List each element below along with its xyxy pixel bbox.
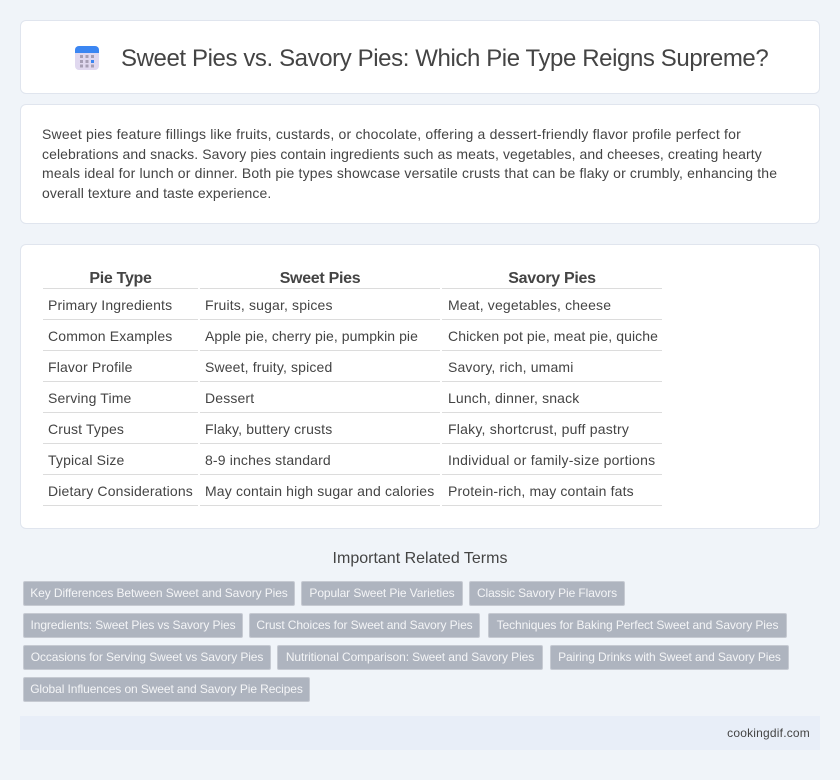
tag: Pairing Drinks with Sweet and Savory Pies	[558, 650, 781, 664]
intro paragraph	[42, 126, 777, 201]
row: dietary considerations: Dietary Considerations	[48, 483, 193, 499]
related terms tags	[23, 581, 789, 702]
row: serving time: Dessert	[205, 390, 254, 406]
footer source text: cookingdif.com	[727, 726, 810, 740]
intro paragraph: overall texture and taste experience.	[42, 185, 271, 201]
intro paragraph: Sweet pies feature fillings like fruits, custards, or chocolate, offering a dessert-friendly flavor profile perfect for	[42, 126, 741, 142]
row: serving time: Lunch, dinner, snack	[448, 390, 579, 406]
row: dietary considerations: Protein-rich, may contain fats	[448, 483, 634, 499]
row: common examples: Common Examples	[48, 328, 172, 344]
row: flavor profile	[48, 359, 574, 375]
title: Sweet Pies vs. Savory Pies: Which Pie Type Reigns Supreme?	[121, 45, 768, 72]
footer bar	[20, 716, 820, 750]
row: common examples	[48, 328, 658, 344]
row: serving time	[48, 390, 580, 406]
row: flavor profile: Savory, rich, umami	[448, 359, 574, 375]
tag	[550, 645, 789, 670]
row: dietary considerations: May contain high sugar and calories	[205, 483, 434, 499]
intro paragraph: celebrations and snacks. Savory pies contain ingredients such as meats, vegetables, and cheeses, creating hearty	[42, 146, 762, 162]
tag: Classic Savory Pie Flavors	[477, 586, 617, 600]
tag: Nutritional Comparison: Sweet and Savory Pies	[286, 650, 534, 664]
row: flavor profile: Sweet, fruity, spiced	[205, 359, 332, 375]
header panel	[20, 20, 820, 94]
tag: Popular Sweet Pie Varieties	[309, 586, 455, 600]
row: typical size: Typical Size	[48, 452, 124, 468]
row: typical size: Individual or family-size portions	[448, 452, 655, 468]
tag	[23, 613, 243, 638]
tag	[23, 581, 295, 606]
table header	[89, 270, 596, 287]
tag	[277, 645, 543, 670]
tag: Techniques for Baking Perfect Sweet and Savory Pies	[497, 618, 778, 632]
intro paragraph: meals ideal for lunch or dinner. Both pie types showcase versatile crusts that can be flaky or crumbly, enhancing the	[42, 165, 777, 181]
tag	[488, 613, 787, 638]
row: primary ingredients: Fruits, sugar, spices	[205, 297, 333, 313]
tag	[23, 677, 310, 702]
row: common examples: Apple pie, cherry pie, pumpkin pie	[205, 328, 418, 344]
tag: Global Influences on Sweet and Savory Pie Recipes	[30, 682, 303, 696]
related terms heading: Important Related Terms	[333, 550, 507, 567]
row: crust types: Crust Types	[48, 421, 124, 437]
row: crust types	[48, 421, 629, 437]
tag	[469, 581, 625, 606]
icon: calendar	[75, 46, 99, 70]
row: crust types: Flaky, shortcrust, puff pastry	[448, 421, 629, 437]
tag: Key Differences Between Sweet and Savory Pies	[30, 586, 288, 600]
row: flavor profile: Flavor Profile	[48, 359, 133, 375]
row: crust types: Flaky, buttery crusts	[205, 421, 332, 437]
tag	[301, 581, 463, 606]
row: typical size: 8-9 inches standard	[205, 452, 331, 468]
row: serving time: Serving Time	[48, 390, 132, 406]
row: primary ingredients	[48, 297, 611, 313]
row: common examples: Chicken pot pie, meat pie, quiche	[448, 328, 658, 344]
table header: Sweet Pies	[280, 270, 360, 287]
row: primary ingredients: Primary Ingredients	[48, 297, 172, 313]
tag: Ingredients: Sweet Pies vs Savory Pies	[31, 618, 235, 632]
intro text panel	[20, 104, 820, 224]
tag	[249, 613, 480, 638]
tag: Crust Choices for Sweet and Savory Pies	[256, 618, 473, 632]
tag: Occasions for Serving Sweet vs Savory Pies	[31, 650, 263, 664]
table header: Pie Type	[89, 270, 152, 287]
tag	[23, 645, 271, 670]
table header: Savory Pies	[508, 270, 596, 287]
comparison table panel	[20, 244, 820, 529]
row: primary ingredients: Meat, vegetables, cheese	[448, 297, 611, 313]
row: typical size	[48, 452, 655, 468]
row: dietary considerations	[48, 483, 634, 499]
